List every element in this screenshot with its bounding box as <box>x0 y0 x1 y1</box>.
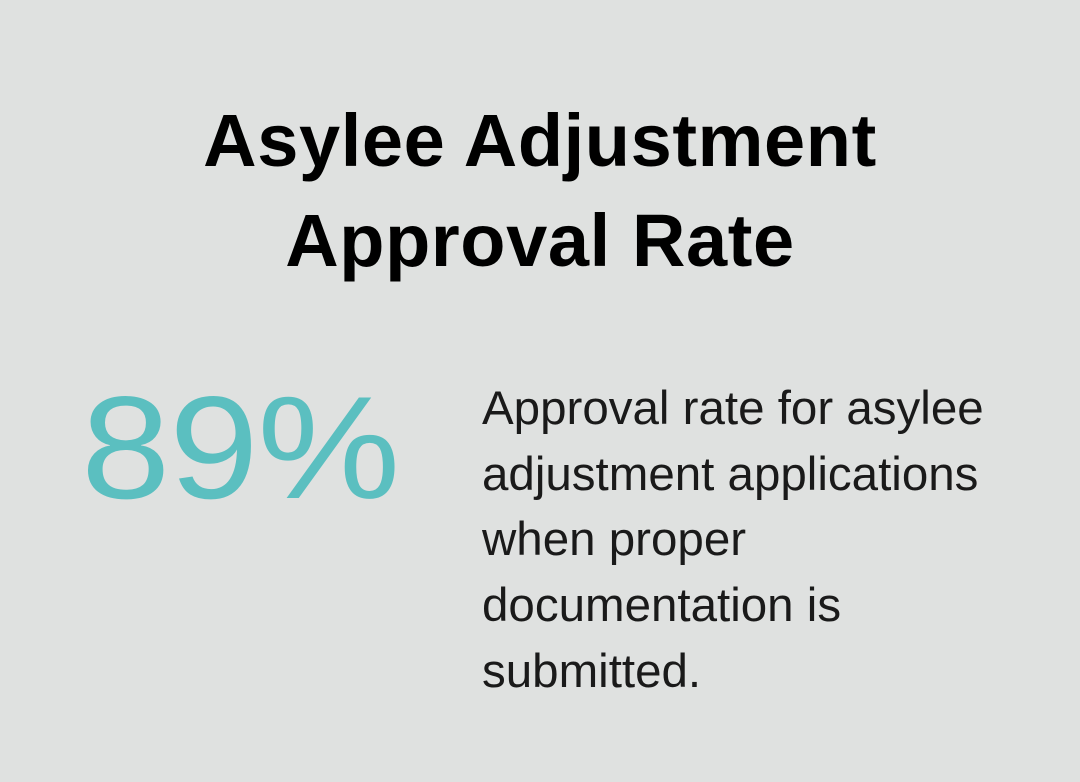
description text: documentation is <box>482 579 841 632</box>
title: Asylee Adjustment <box>203 99 877 182</box>
description text: when proper <box>482 513 746 566</box>
description text: adjustment applications <box>482 448 978 501</box>
description text <box>482 382 984 698</box>
title <box>203 99 877 282</box>
description text: submitted. <box>482 645 701 698</box>
description text: Approval rate for asylee <box>482 382 984 435</box>
title: Approval Rate <box>285 199 795 282</box>
stat: 89%: 89% <box>81 366 399 529</box>
